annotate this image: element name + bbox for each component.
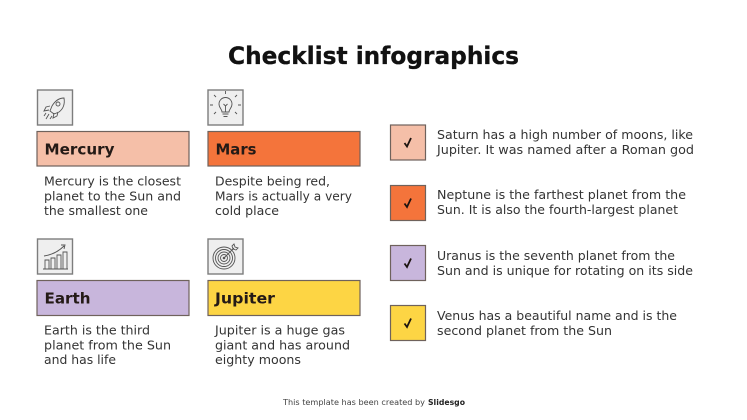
checkbox: Venus [390,306,426,340]
text: Jupiter description: giant and has around [215,338,350,352]
heading bar: Mars [208,132,360,166]
heading bar: Jupiter: Jupiter [214,290,276,308]
text: Venus: Venus has a beautiful name and is the [437,309,677,323]
text: Mars description: Mars is actually a very [215,190,352,204]
text: Earth description: and has life [44,353,116,367]
panel: Jupiter [208,239,360,367]
text: Uranus: Uranus is the seventh planet from the [437,249,675,263]
panel: Mercury [37,90,189,218]
checkbox: Uranus [390,246,426,280]
text: Neptune: Neptune is the farthest planet from the [437,188,686,202]
heading bar: Mars: Mars [216,142,257,158]
text: Mercury description: the smallest one [44,204,148,218]
text: Jupiter description: eighty moons [215,353,301,367]
icon: rocket [38,90,72,125]
heading bar: Jupiter [208,280,360,316]
icon: target [208,239,243,274]
text: Venus: second planet from the Sun [437,324,612,338]
text: Jupiter description: Jupiter is a huge gas [214,324,345,338]
heading bar: Earth: Earth [44,290,90,308]
footer credit: Slidesgo [428,398,465,407]
icon: light bulb [208,90,243,125]
text: Mars description: Despite being red, [215,174,330,188]
checklist item: Uranus [390,246,693,280]
text: Neptune: Sun. It is also the fourth-largest planet [437,203,678,217]
title: Checklist infographics [228,42,519,70]
checkbox: Neptune [390,186,426,220]
footer credit: This template has been created by [282,398,426,407]
panel: Mars [208,90,360,218]
checklist item: Venus [390,306,681,340]
text: Uranus: Sun and is unique for rotating on its side [437,264,693,278]
text: Mercury description: Mercury is the closest [44,174,181,188]
icon: growth chart [38,239,72,274]
checklist item: Neptune [390,186,690,220]
checkbox: Saturn [390,125,426,160]
text: Saturn: Jupiter. It was named after a Roman god [436,143,694,157]
text: Earth description: Earth is the third [44,324,150,338]
text: Saturn: Saturn has a high number of moons, like [437,128,693,142]
panel: Earth [37,239,189,367]
heading bar: Mercury: Mercury [44,142,115,158]
text: Earth description: planet from the Sun [44,338,171,352]
text: Mars description: cold place [215,204,279,218]
heading bar: Mercury [37,132,189,166]
text: Mercury description: planet to the Sun and [44,190,181,204]
checklist item: Saturn [390,125,697,160]
heading bar: Earth [37,280,189,316]
